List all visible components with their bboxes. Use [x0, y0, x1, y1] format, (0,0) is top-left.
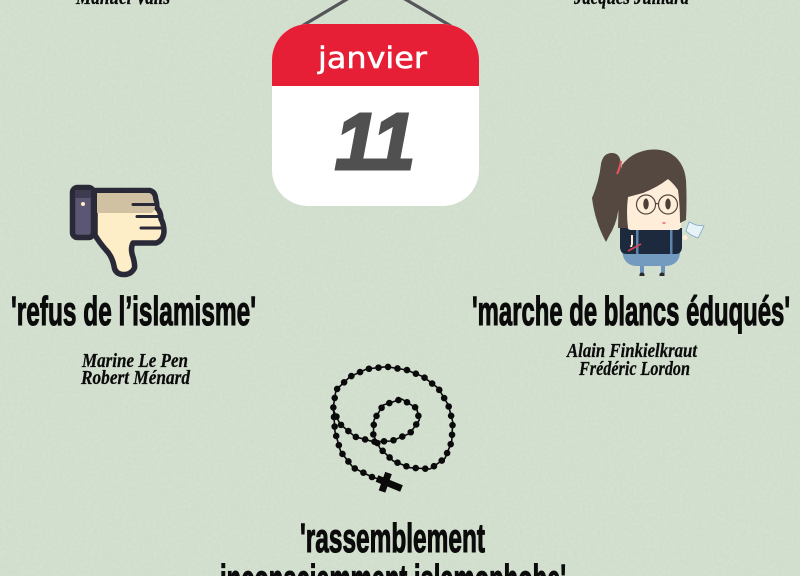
mouth	[662, 222, 666, 224]
names: Alain Finkielkraut, Frédéric Lordon: Alain Finkielkraut	[565, 340, 698, 362]
pen	[628, 244, 641, 251]
names: Alain Finkielkraut, Frédéric Lordon	[565, 340, 698, 380]
icon: girl with glasses and book	[592, 150, 704, 276]
cuff button	[81, 202, 85, 206]
rosary chain	[333, 367, 453, 481]
cuff top shade	[75, 190, 91, 198]
icon: thumbs down	[72, 188, 164, 275]
book	[686, 222, 704, 238]
names: Marine Le Pen, Robert Ménard: Marine Le Pen	[81, 350, 188, 372]
hand	[95, 190, 164, 275]
braces	[636, 228, 672, 254]
day number: 11	[335, 97, 415, 186]
names: Marine Le Pen, Robert Ménard	[80, 350, 191, 389]
cuff	[72, 188, 94, 238]
ponytail	[592, 153, 624, 242]
sweater	[620, 228, 682, 254]
shoes	[640, 272, 664, 276]
right hand	[682, 235, 688, 240]
trousers	[622, 250, 680, 266]
hair	[618, 150, 686, 228]
rosary cross	[377, 473, 402, 492]
glasses	[636, 195, 678, 214]
left hand with pen	[630, 235, 633, 247]
finger lines	[133, 204, 163, 228]
heading: refus de l'islamisme: 'refus de l’islamisme'	[11, 288, 256, 334]
hand shadow	[97, 193, 155, 213]
calendar hanging cord	[302, 0, 451, 26]
calendar red header	[272, 24, 479, 86]
face	[627, 180, 681, 230]
month label: janvier	[317, 41, 427, 75]
eyes	[643, 198, 671, 210]
heading: rassemblement inconsciemment islamophobe: 'rassemblement	[300, 515, 485, 561]
hair tie	[617, 161, 621, 174]
right lens	[658, 195, 678, 214]
names: Alain Finkielkraut, Frédéric Lordon: Frédéric Lordon	[578, 358, 690, 380]
left lens	[636, 195, 656, 214]
names: Marine Le Pen, Robert Ménard: Robert Ménard	[80, 367, 191, 389]
icon: rosary	[333, 367, 453, 492]
calendar page	[272, 24, 479, 206]
heading: rassemblement inconsciemment islamophobe	[220, 515, 566, 576]
icon: hanging calendar	[272, 0, 479, 206]
legs	[640, 262, 665, 274]
rosary beads	[333, 367, 453, 477]
